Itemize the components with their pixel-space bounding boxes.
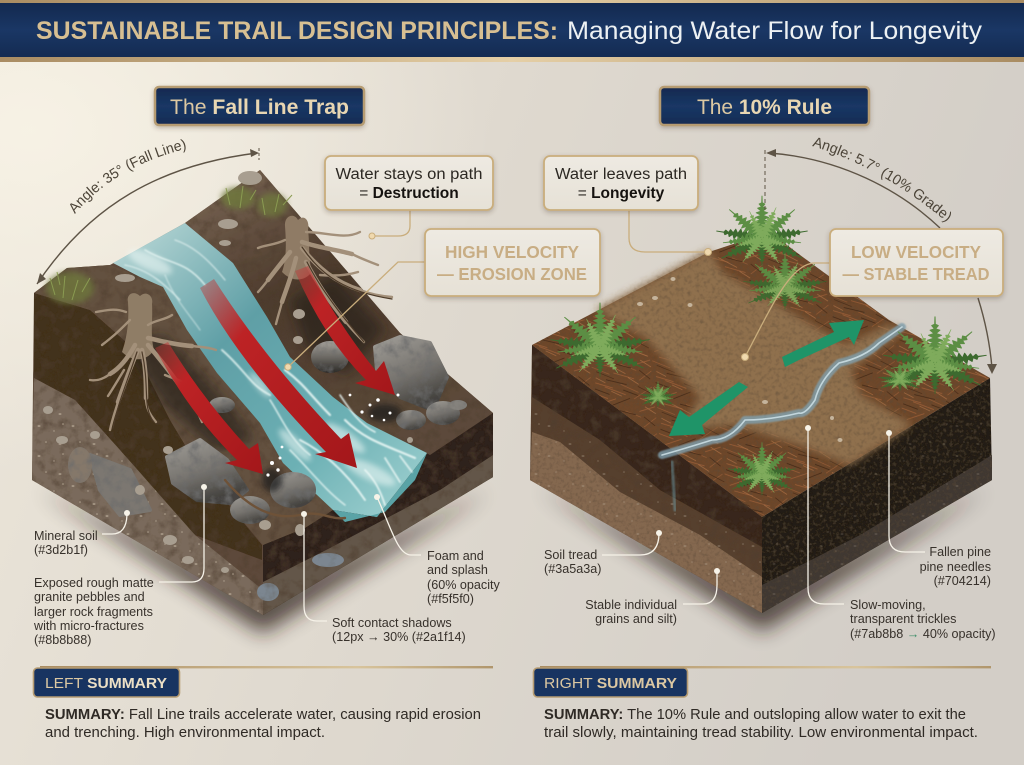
label: exposed granite: granite pebbles and (34, 590, 145, 604)
heading: The Fall Line Trap (155, 87, 364, 125)
badge: right summary: RIGHT SUMMARY (544, 675, 677, 692)
callout: longevity: = Longevity (578, 185, 665, 202)
surface base (532, 232, 990, 517)
water channel (113, 223, 427, 517)
silhouette soil (32, 170, 493, 615)
left face speckle (530, 397, 762, 613)
label: foam and splash: and splash (427, 563, 488, 577)
badge: left summary (34, 668, 180, 697)
panel: fall line terrain block (32, 170, 493, 634)
label: fallen pine needles (886, 430, 991, 588)
panel: ten percent rule terrain block (530, 196, 992, 632)
label: stable grains (585, 568, 720, 626)
contact shadow (40, 490, 488, 634)
right bank (185, 170, 493, 455)
red flow arrows (155, 266, 395, 474)
label: slow-moving trickles: transparent trickles (850, 612, 956, 626)
foam patches (125, 245, 399, 491)
label: fallen pine needles: (#704214) (934, 574, 991, 588)
right face speckle (762, 395, 992, 613)
badge: right summary (534, 668, 688, 697)
label: fallen pine needles: pine needles (920, 560, 991, 574)
angle arc: 5.7 degrees (764, 138, 997, 374)
water streaks (125, 240, 415, 505)
angle arc: 35 degrees (36, 139, 296, 318)
label: slow-moving trickles (805, 425, 996, 641)
label: slow-moving trickles: Slow-moving, (850, 598, 926, 612)
pebbles (43, 171, 413, 573)
right face dark soil (263, 413, 493, 615)
soil tread (595, 250, 912, 465)
label: foam and splash: Foam and (427, 549, 484, 563)
callout: longevity: Water leaves path (555, 166, 687, 183)
label: stable grains: Stable individual (585, 598, 677, 612)
green drainage arrows (669, 320, 864, 436)
label: mineral soil: Mineral soil (34, 529, 98, 543)
summary text: right: SUMMARY: The 10% Rule and outsloping allow water to exit the (544, 706, 966, 723)
title: SUSTAINABLE TRAIL DESIGN PRINCIPLES: (36, 17, 558, 45)
left face speckle (32, 400, 263, 615)
left bank (34, 265, 333, 545)
callout: low velocity: LOW VELOCITY (851, 242, 981, 262)
arrow: water exits down-left (669, 382, 748, 436)
left face top layer (532, 345, 762, 547)
heading: The 10% Rule: The 10% Rule (697, 96, 832, 119)
callout: destruction (325, 156, 493, 210)
rocks (68, 337, 467, 601)
arrow: water exits up-right (782, 320, 864, 367)
label: exposed granite: Exposed rough matte (34, 576, 154, 590)
callout: longevity (544, 156, 698, 210)
callout: high velocity (425, 229, 600, 296)
label: mineral soil: (#3d2b1f) (34, 543, 88, 557)
right face dark soil (762, 378, 992, 613)
contact shadow (540, 488, 986, 632)
pine needle litter (532, 232, 990, 517)
callout: destruction: Water stays on path (336, 166, 482, 183)
callout: low velocity (830, 229, 1003, 296)
badge: left summary: LEFT SUMMARY (45, 675, 167, 692)
label: soft contact shadows: Soft contact shadows (332, 616, 452, 630)
angle arc: 35 degrees: Angle: 35° (Fall Line) (70, 139, 186, 214)
right face lower band (263, 455, 493, 615)
panel: right summary (534, 666, 991, 741)
heading: The Fall Line Trap: The Fall Line Trap (170, 96, 349, 119)
label: soft contact shadows (301, 511, 466, 644)
callout: low velocity: — STABLE TREAD (842, 264, 990, 284)
ferns (549, 196, 988, 495)
label: exposed granite: (#8b8b88) (34, 633, 91, 647)
title: Managing Water Flow for Longevity (567, 17, 983, 45)
label: stable grains: grains and silt) (595, 612, 677, 626)
callout: destruction: = Destruction (359, 185, 459, 202)
heading: The 10% Rule (660, 87, 869, 125)
panel: left summary (34, 666, 493, 741)
label: soil tread: Soil tread (544, 548, 597, 562)
callout: high velocity: — EROSION ZONE (437, 264, 587, 284)
splash (262, 394, 402, 492)
label: exposed granite: larger rock fragments (34, 605, 153, 619)
label: foam and splash (374, 494, 501, 606)
label: fallen pine needles: Fallen pine (929, 545, 991, 559)
summary text: left (45, 706, 481, 741)
callout: high velocity: HIGH VELOCITY (445, 242, 579, 262)
tread pebbles (637, 277, 842, 442)
left face: mineral soil wedge (34, 293, 262, 560)
summary text: right (544, 706, 978, 741)
label: slow-moving trickles: (#7ab8b8 → 40% opacity) (850, 627, 996, 641)
summary text: left: and trenching. High environmental impact. (45, 724, 325, 741)
label: exposed granite (33, 484, 207, 647)
dark bank shading (125, 275, 385, 450)
angle arc: 5.7 degrees: Angle: 5.7° (10% Grade) (812, 138, 951, 222)
right face lower layer (762, 455, 992, 613)
header banner (0, 0, 1024, 62)
transparent stream (662, 327, 902, 510)
left red arrow (155, 342, 263, 474)
label: exposed granite: with micro-fractures (33, 619, 144, 633)
label: mineral soil (34, 510, 130, 557)
left face lower layer (530, 432, 762, 613)
label: soil tread (544, 530, 662, 576)
label: foam and splash: (#f5f5f0) (427, 592, 474, 606)
summary text: left: SUMMARY: Fall Line trails accelerate water, causing rapid erosion (45, 706, 481, 723)
grass tufts (46, 186, 292, 304)
label: soft contact shadows: (12px → 30% (#2a1f14) (332, 630, 466, 644)
label: soil tread: (#3a5a3a) (544, 562, 601, 576)
label: foam and splash: (60% opacity (427, 578, 501, 592)
summary text: right: trail slowly, maintaining tread stability. Low environmental impact. (544, 724, 978, 741)
centre red arrow (200, 279, 357, 468)
left face: granite soil (32, 378, 263, 615)
root systems (90, 216, 392, 518)
leader lines for callouts (285, 210, 830, 370)
water front (333, 453, 427, 522)
right red arrow (295, 266, 395, 395)
left face soil (530, 345, 762, 613)
